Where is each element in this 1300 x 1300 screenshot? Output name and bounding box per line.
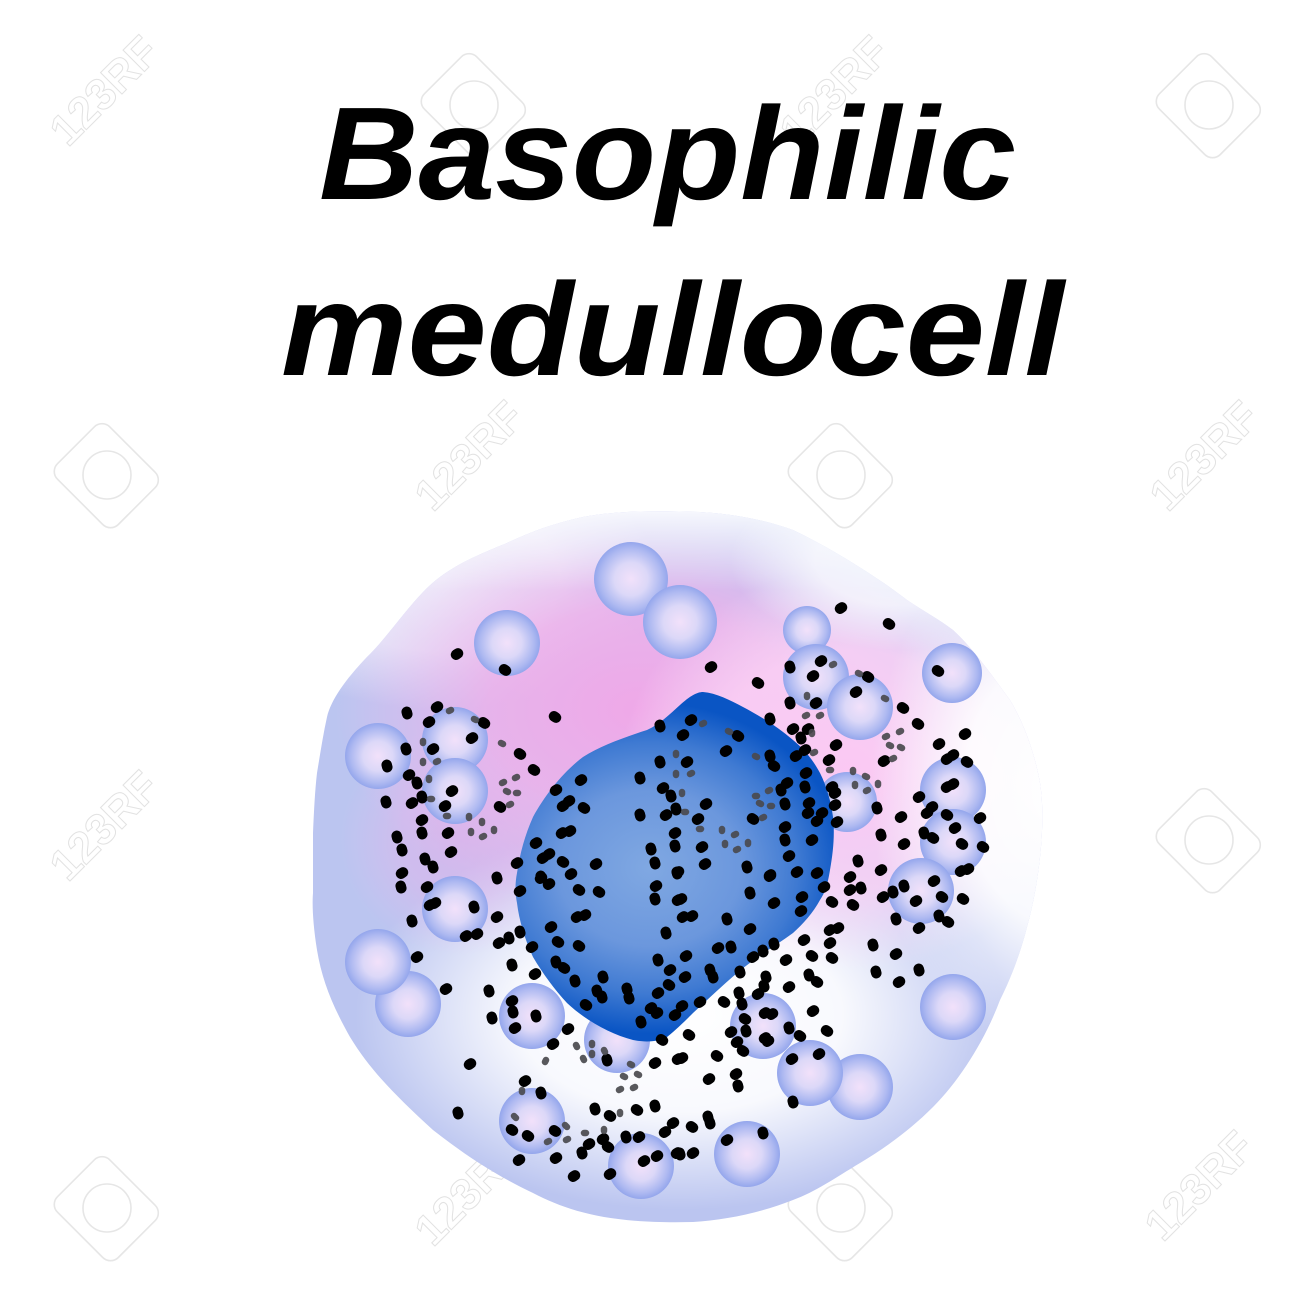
watermark: 123RF logos: 123RF (770, 27, 898, 155)
watermark: 123RF logos: 123RF (1135, 1122, 1263, 1250)
watermark: 123RF logos: 123RF (405, 392, 533, 520)
title: Basophilic (319, 80, 1016, 227)
watermark: 123RF logos: 123RF (40, 27, 168, 155)
watermark: 123RF logos: 123RF (770, 762, 898, 890)
vesicles behind nucleus (584, 772, 877, 1073)
vesicles (345, 542, 986, 1199)
nucleus (516, 692, 834, 1041)
title (281, 80, 1066, 403)
cell body (312, 511, 1042, 1222)
granules (386, 607, 984, 1177)
watermark: 123RF logos: 123RF (40, 762, 168, 890)
title: medullocell (281, 256, 1066, 403)
watermark: 123RF logos: 123RF (405, 1127, 533, 1255)
watermark: 123RF logos: 123RF (1140, 392, 1268, 520)
